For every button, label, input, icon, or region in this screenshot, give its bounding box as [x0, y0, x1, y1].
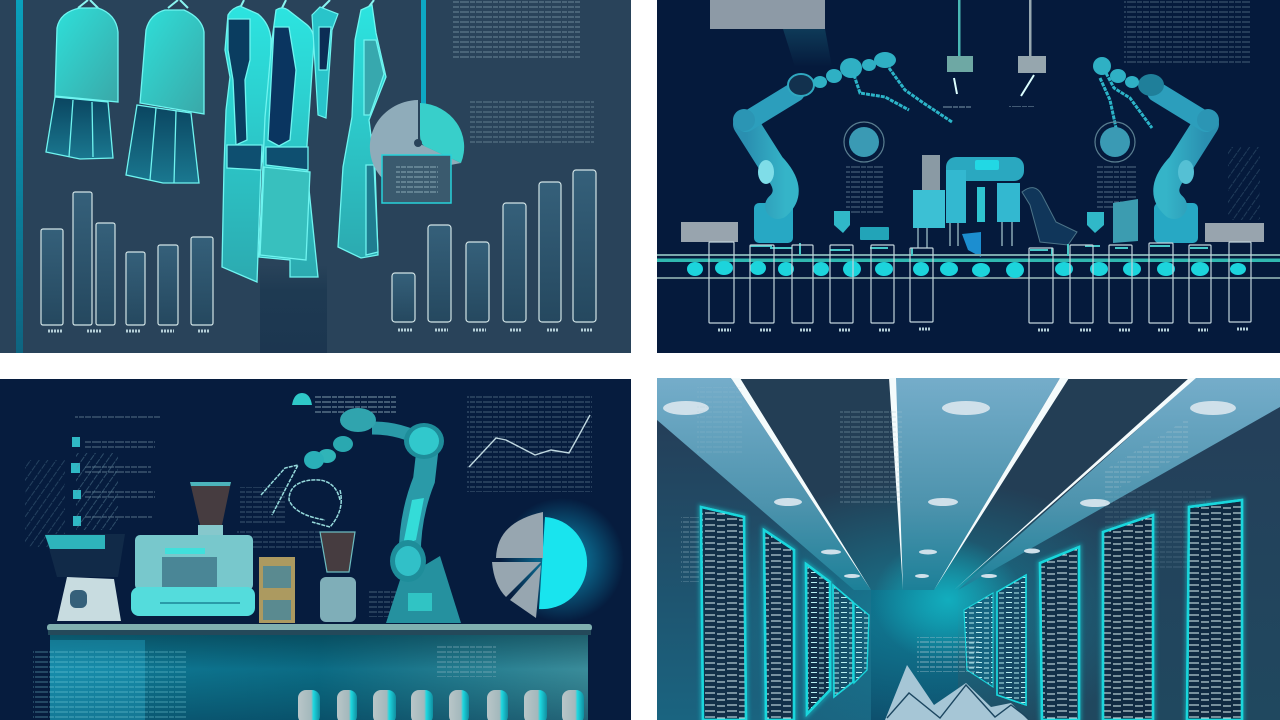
garment: second apron and skirt: [126, 10, 204, 183]
checklist icons and notes: [71, 437, 155, 526]
pie chart: [492, 498, 624, 622]
text block: top right: [1124, 0, 1250, 63]
garment: narrow dress behind: [312, 7, 338, 118]
capsule bar chart: [298, 690, 584, 720]
text block: line chart background: [467, 393, 592, 492]
counter: [33, 624, 592, 720]
garment: long coat right: [259, 8, 318, 277]
robot arm: [304, 408, 461, 623]
garment: first apron and skirt: [46, 8, 118, 159]
text blocks: ceiling: [681, 387, 1211, 582]
light beam under box: [783, 29, 832, 67]
garment: slim dress right: [338, 5, 386, 258]
conveyor with bowls: [657, 243, 1280, 279]
sketch outline: [261, 465, 341, 527]
text block: checklist heading: [75, 416, 161, 420]
panel: coffee robot: [0, 379, 631, 720]
bar chart: left: [41, 192, 213, 331]
gray display box: [710, 0, 825, 29]
gray tags: [681, 222, 1264, 242]
hatch marks: [25, 453, 118, 547]
bar chart: right: [392, 170, 596, 330]
text block: robot sketch notes: [237, 487, 396, 617]
small equipment: [834, 199, 1138, 243]
panel: server corridor: [657, 378, 1280, 720]
text block: counter left: [33, 648, 186, 718]
corridor walls and floor glow: [657, 407, 1280, 720]
gauge: right: [1095, 122, 1136, 208]
garment: long coat left: [222, 6, 271, 282]
line chart: [469, 415, 590, 467]
text block: top callout with icon: [292, 393, 396, 413]
text block: counter right: [436, 646, 496, 677]
gauge: left: [844, 122, 884, 213]
panel: robot production line: [657, 0, 1280, 353]
hangers: [78, 0, 374, 8]
text block: chart notes: [469, 100, 594, 143]
hatch marks: [1228, 147, 1260, 220]
text block: corridor centre: [917, 637, 979, 672]
espresso machine: [131, 482, 255, 616]
robot arm: right: [1093, 57, 1219, 243]
text block: upper notes: [453, 0, 580, 58]
ceiling lights: [663, 401, 1236, 578]
rack glow halos: [701, 500, 1242, 720]
server racks: left: [701, 507, 869, 720]
panel: garments: [0, 0, 631, 353]
bar chart: production levels: [709, 242, 1251, 330]
hanging fixtures: [942, 0, 1046, 108]
central machine: [913, 155, 1077, 257]
label card: [382, 155, 451, 203]
coffee cup and bottle: [320, 532, 356, 622]
pie chart with label: [370, 100, 464, 203]
product crates: [259, 557, 295, 623]
robot arm: left: [733, 52, 952, 243]
server racks: right: [964, 500, 1242, 720]
area chart: [885, 665, 1028, 720]
ceiling panels: [657, 378, 1280, 590]
grinder: [45, 534, 125, 621]
